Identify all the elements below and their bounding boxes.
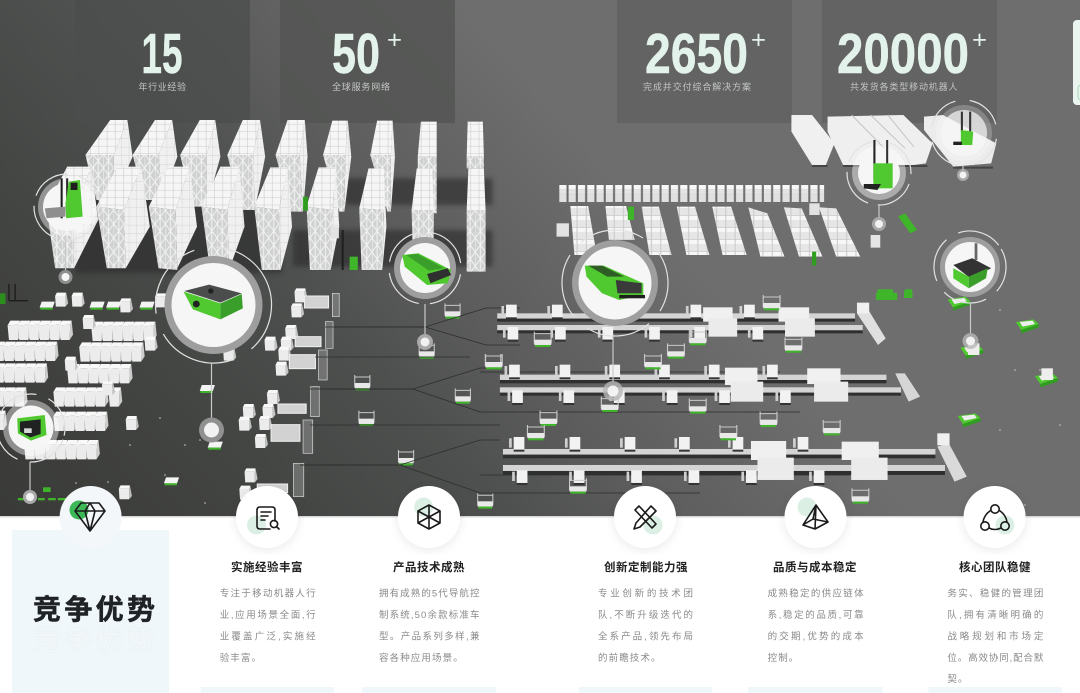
icon circle: diamond: [60, 486, 122, 548]
footer bar: [579, 687, 712, 693]
description: 专注于移动机器人行: [220, 588, 316, 600]
icon circle: document and wrench: [236, 486, 298, 548]
heading ghost reflection: 竞争优势: [33, 625, 155, 656]
workstations, left-centre: [239, 288, 501, 509]
callout: pallet stacker, top right corner: [926, 95, 1002, 181]
stat number 15: 15: [142, 22, 182, 86]
description: 队,拥有清晰明确的: [947, 609, 1043, 621]
stat panel: mobile robots shipped: [822, 0, 997, 123]
description: 容各种应用场景。: [379, 652, 464, 664]
description: [220, 588, 316, 664]
floor background: [0, 0, 1080, 520]
panel: competitive advantages title: [12, 486, 169, 693]
icon: conveyor AGV: [953, 243, 991, 288]
heading: 创新定制能力强: [604, 560, 688, 574]
next-slide tab at right edge: [1073, 20, 1080, 105]
stat number 50+: +: [387, 26, 402, 54]
heading: 产品技术成熟: [393, 560, 465, 574]
footer bar: [362, 687, 496, 693]
column: core team: [928, 486, 1062, 693]
heading: 核心团队稳健: [959, 560, 1031, 574]
footer bar: [748, 687, 883, 693]
icon: green carrier AGV: [402, 253, 451, 285]
callout: forklift AGV: [25, 165, 109, 284]
icon: pallet stacker: [953, 112, 973, 145]
icon circle: pencil and ruler: [614, 486, 676, 548]
scattered floor dots: [75, 309, 1061, 506]
icon circle: network cube: [398, 486, 460, 548]
icon: forklift: [45, 178, 83, 218]
description: 战略规划和市场定: [947, 630, 1044, 642]
guide wires on floor: [300, 308, 850, 493]
description: 控制。: [768, 652, 799, 664]
description: [379, 588, 480, 664]
callout: green AGV, centre-left: [383, 226, 467, 350]
stat number 50+: 50: [332, 22, 380, 86]
callout: large latent AGV: [134, 226, 293, 442]
heading: 品质与成本稳定: [773, 560, 857, 574]
description: 的交期,优势的成本: [768, 630, 864, 642]
callout: large green AGV, centre: [540, 208, 690, 401]
icon circle: team nodes: [964, 486, 1026, 548]
description: 契。: [947, 673, 969, 685]
warehouse racks: [46, 120, 486, 272]
hairline at floor edge: [0, 516, 1080, 518]
conveyor lines: [485, 291, 1058, 504]
description: 系,稳定的品质,可靠: [768, 609, 864, 621]
stat number 2650+: +: [751, 26, 766, 54]
stat panel: service network: [280, 0, 455, 123]
description: 专业创新的技术团: [598, 588, 693, 600]
description: [947, 588, 1044, 685]
column: stable quality and cost: [748, 486, 883, 693]
callout: conveyor AGV, right: [921, 218, 1019, 349]
column: custom innovation: [579, 486, 712, 693]
rack shadows: [76, 178, 492, 273]
description: 验丰富。: [220, 652, 262, 664]
description: [768, 588, 864, 664]
description: 成熟稳定的供应链体: [768, 588, 864, 600]
description: 拥有成熟的5代导航控: [379, 588, 480, 600]
description: 位。高效协同,配合默: [947, 652, 1044, 664]
column: mature technology: [362, 486, 496, 693]
description: 业覆盖广泛,实施经: [220, 630, 316, 642]
description: 型。产品系列多样,兼: [379, 630, 480, 642]
heading: 竞争优势: [33, 594, 155, 625]
description: 的前瞻技术。: [598, 652, 662, 664]
callout: stacker forklift, top right: [838, 132, 920, 231]
description: 务实、稳健的管理团: [947, 588, 1043, 600]
description: 业,应用场景全面,行: [220, 609, 316, 621]
stat label: 全球服务网络: [332, 81, 390, 92]
stat label: 共发货各类型移动机器人: [850, 81, 958, 92]
footer bar: [201, 687, 334, 693]
icon: latent AGV: [184, 285, 243, 319]
scattered white pallets, left: [0, 284, 236, 500]
stat panel: delivered solutions: [617, 0, 792, 123]
stat number 2650+: 2650: [645, 22, 748, 86]
icon: stacker forklift: [864, 140, 893, 190]
stat panel: years of experience: [75, 0, 250, 123]
stat number 20000+: +: [972, 26, 987, 54]
stat label: 年行业经验: [138, 81, 186, 92]
callout: compact charger unit, bottom left: [0, 384, 75, 504]
description: 制系统,50余款标准车: [379, 609, 480, 621]
forklift by racks: [303, 197, 358, 270]
footer bar: [928, 687, 1062, 693]
icon: charger unit: [17, 415, 46, 441]
white lower section: [0, 517, 1080, 693]
white pallet grid, centre-right: [557, 185, 917, 298]
description: 全系产品,领先布局: [598, 630, 693, 642]
stat label: 完成并交付综合解决方案: [643, 81, 751, 92]
stat number 20000+: 20000: [837, 22, 969, 86]
icon circle: pyramid: [784, 486, 846, 548]
description: 队,不断升级迭代的: [598, 609, 693, 621]
white trailers, top right: [791, 115, 996, 169]
icon: large green AGV: [585, 266, 645, 300]
heading: 实施经验丰富: [231, 560, 303, 574]
column: implementation experience: [201, 486, 334, 693]
description: [598, 588, 693, 664]
